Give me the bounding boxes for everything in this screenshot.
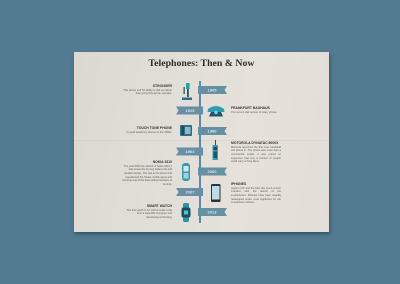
ribbon: 2013 (198, 208, 227, 216)
panel: paper sheet (74, 52, 329, 232)
ribbon: 2000: 2000 (208, 169, 217, 174)
ribbon: 1980 (198, 127, 227, 135)
text: Frankfurt Bauhaus (231, 106, 277, 114)
icon: Nokia phone (182, 163, 190, 181)
icon: smart watch (182, 203, 190, 222)
ribbon: 1980: 1980 (208, 128, 217, 134)
ribbon: 2007: 2007 (186, 190, 195, 194)
ribbon: 1925: 1925 (186, 108, 195, 113)
ribbon: 2000 (198, 168, 227, 176)
text: Nokia 3310: NOKIA 3310 (153, 160, 172, 164)
text: Smart watch (126, 204, 172, 219)
ribbon: 1925 (176, 106, 203, 114)
text: Motorola DynaTAC 8000X: Motorola launched the first ever handheld cell phone in. The phone was more than a commercial model, it was priced so expensive that only a fraction of people could carry a thing like it. (231, 146, 281, 163)
text: Stronger (123, 84, 172, 95)
chart: timeline (176, 81, 227, 223)
ribbon: 2007 (176, 188, 203, 196)
icon: Motorola brick phone (212, 140, 218, 160)
text: iPhones: IPHONES (231, 182, 246, 186)
icon: iPhone (211, 184, 220, 202)
icon: candlestick phone (182, 83, 192, 100)
text: Frankfurt Bauhaus: FRANKFURT BAUHAUS (231, 106, 270, 110)
title: Telephones: Then & Now (149, 58, 254, 68)
text: Touch tone phone (126, 126, 172, 134)
text: Smart watch: SMART WATCH (147, 204, 172, 208)
ribbon: 1963: 1963 (186, 149, 195, 154)
icon: desk phone (180, 125, 192, 136)
text: Smart watch: The first watch to be sold at scale is the term a wearable computer and developing technology (127, 209, 172, 219)
timeline spine (199, 81, 201, 223)
text: Nokia 3310: The year 2000 the advent of Nokia 3310 it was known for its long battery life and durable design. The rest is the phone that popularised the Snake mobile game and became one of the best selling handsets of its time. (123, 165, 172, 186)
text: Stronger: This phone and his ability to dial out rather than going through an operator. (123, 89, 172, 95)
ribbon: 2013: 2013 (208, 210, 217, 214)
text: iPhones: Apple's iOS and the Mac like touch screen interface with the launch of the smartphones. iPhones have been steadily redesigned under most significant for the smartphone industry. (231, 187, 281, 204)
ribbon: 1905: 1905 (208, 88, 217, 92)
text: Touch tone phone: In good telephony phones in the 1960s. (127, 131, 172, 134)
text: Motorola DynaTAC 8000X: MOTOROLA DYNATAC 8000X (231, 141, 278, 145)
text: Frankfurt Bauhaus: The current dial version of rotary phone. (231, 111, 277, 114)
ribbon: 1963 (176, 148, 203, 156)
text: Stronger: STRONGER (153, 84, 172, 88)
icon: rotary phone (208, 106, 224, 116)
ribbon: 1905 (198, 86, 227, 94)
text: Touch tone phone: TOUCH TONE PHONE (137, 126, 172, 130)
